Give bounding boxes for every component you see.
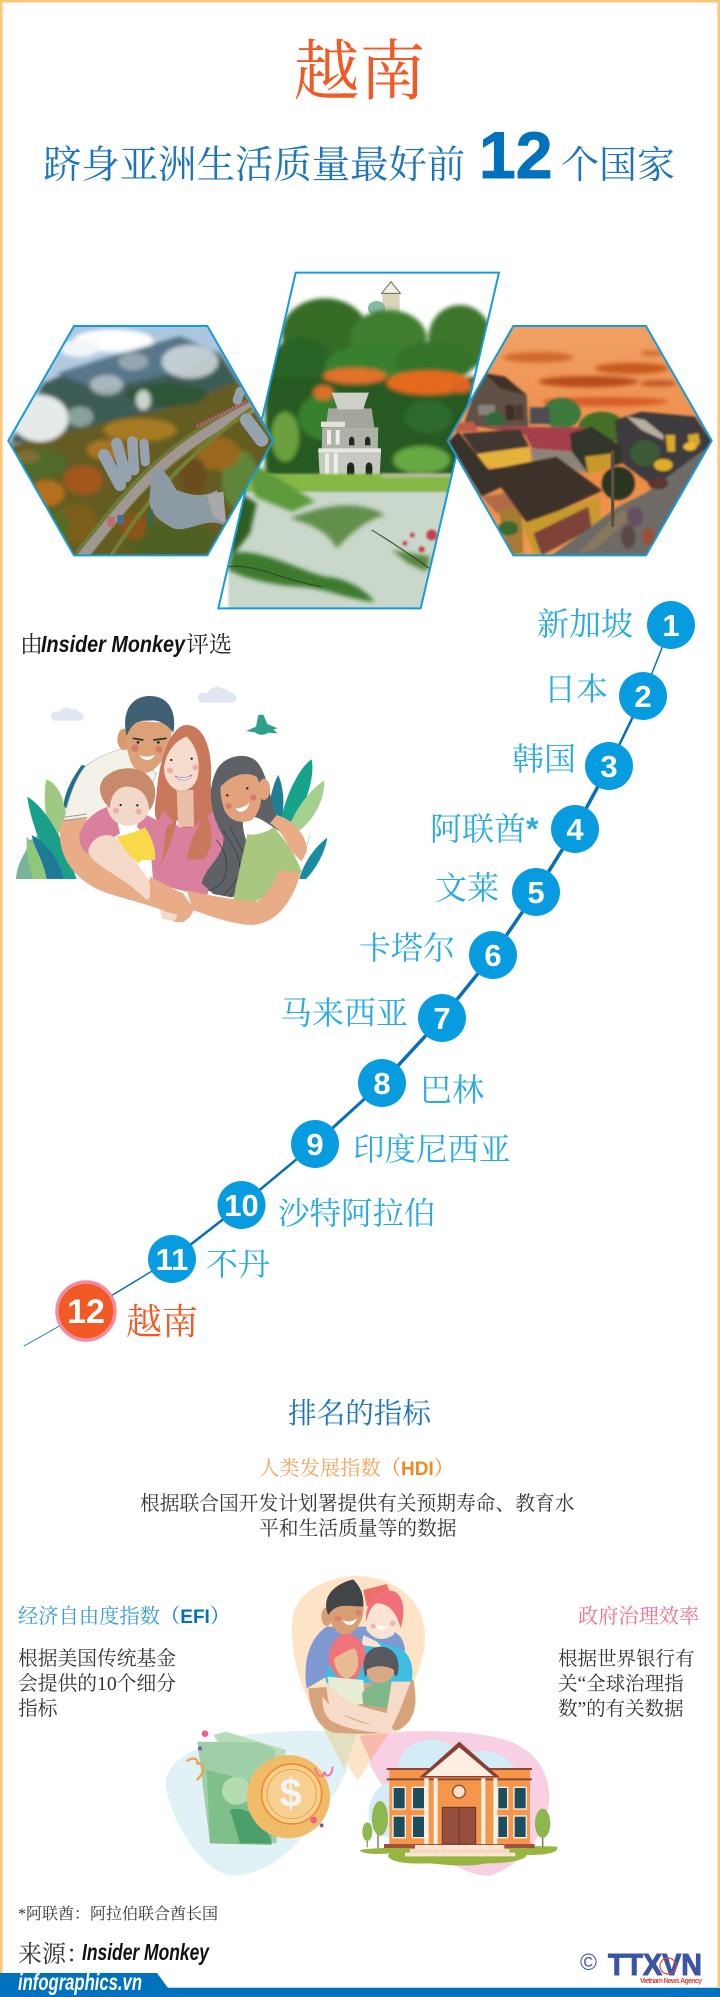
block: EFI: 经济自由度指数（EFI） [18, 1605, 230, 1628]
plants behind family [16, 759, 327, 879]
block: EFI: 指标 [18, 1698, 59, 1720]
rank 4 UAE: 阿联酋* [430, 811, 539, 847]
rank 5 Brunei: 5 [527, 875, 545, 910]
heading: ranking indicators: 排名的指标 [288, 1398, 432, 1430]
icon: clouds [51, 687, 237, 721]
rank 7 Malaysia [280, 994, 466, 1042]
subtitle: 跻身亚洲生活质量最好前 [43, 144, 465, 187]
block: HDI: 平和生活质量等的数据 [259, 1518, 457, 1540]
block: EFI: 根据美国传统基金 [18, 1648, 176, 1670]
caption: selected by Insider Monkey: 评选 [186, 632, 232, 657]
rank 10 Saudi Arabia [218, 1181, 436, 1231]
block: government effectiveness: 关“全球治理指 [558, 1673, 684, 1695]
caption: selected by Insider Monkey: 由 [20, 632, 43, 657]
rank 10 Saudi Arabia: 沙特阿拉伯 [278, 1196, 436, 1231]
rank 11 Bhutan [148, 1235, 270, 1283]
man [60, 696, 194, 923]
rank 3 South Korea [512, 741, 633, 790]
logo: TTXVN: Vietnam News Agency [640, 1978, 702, 1985]
block: HDI: 人类发展指数（HDI） [259, 1457, 454, 1480]
rank 9 Indonesia: 9 [306, 1127, 324, 1162]
rank 8 Bahrain: 巴林 [420, 1072, 484, 1108]
rank 5 Brunei: 文莱 [435, 870, 499, 906]
rank 2 Japan: 日本 [544, 671, 608, 707]
title: 越南 [294, 36, 426, 109]
block: HDI: 根据联合国开发计划署提供有关预期寿命、教育水 [140, 1493, 575, 1515]
rank 6 Qatar [359, 930, 517, 979]
family in pin [306, 1579, 415, 1734]
icon: bird [246, 715, 278, 735]
source: Insider Monkey [82, 1939, 210, 1965]
rank 11 Bhutan: 11 [156, 1242, 188, 1277]
rank 10 Saudi Arabia: 10 [224, 1188, 259, 1223]
photo: Hoi An old town at sunset [445, 320, 720, 560]
rank 1 Singapore: 新加坡 [537, 606, 633, 642]
logo: TTXVN: TTXVN [608, 1947, 702, 1982]
rank 12 Vietnam [57, 1282, 198, 1342]
block: EFI: 会提供的10个细分 [18, 1673, 176, 1695]
footer bar: infographics.vn [18, 1969, 142, 1995]
photo: Golden Bridge hands [0, 320, 280, 560]
subtitle: 个国家 [561, 145, 675, 187]
block: government effectiveness: 根据世界银行有 [558, 1648, 695, 1670]
rank 1 Singapore [537, 601, 695, 649]
woman [150, 725, 230, 897]
girl [187, 756, 307, 925]
rank 7 Malaysia: 7 [433, 1001, 451, 1036]
rank 8 Bahrain: 8 [373, 1066, 391, 1101]
block: EFI [18, 1605, 230, 1720]
footer bar [0, 1969, 720, 1997]
rank 9 Indonesia: 印度尼西亚 [353, 1132, 511, 1167]
block: HDI [140, 1457, 575, 1540]
subtitle [43, 118, 675, 192]
rank 6 Qatar: 卡塔尔 [359, 930, 455, 966]
footnote: *阿联酋：阿拉伯联合酋长国 [18, 1905, 218, 1923]
caption: selected by Insider Monkey: Insider Monkey [41, 631, 186, 657]
rank 6 Qatar: 6 [484, 938, 502, 973]
rank 11 Bhutan: 不丹 [206, 1246, 270, 1282]
rank 3 South Korea: 3 [600, 749, 618, 784]
rank 7 Malaysia: 马来西亚 [280, 995, 408, 1031]
rank 5 Brunei [435, 868, 560, 916]
subtitle: 12 [479, 118, 552, 192]
illustration: three indicator pins [166, 1576, 557, 1876]
rank 4 UAE [430, 805, 599, 853]
rank 3 South Korea: 韩国 [512, 741, 576, 777]
rank 1 Singapore: 1 [662, 608, 680, 643]
rank 2 Japan: 2 [634, 679, 652, 714]
rank 9 Indonesia [291, 1120, 511, 1168]
block: government effectiveness [558, 1605, 699, 1720]
blob: government [359, 1731, 549, 1876]
rank 4 UAE: 4 [566, 812, 584, 847]
source [18, 1939, 210, 1968]
block: government effectiveness: 数”的有关数据 [558, 1698, 684, 1720]
icon: government building [360, 1742, 557, 1866]
illustration: happy family [16, 687, 327, 925]
icon: money and coin [188, 1730, 333, 1845]
rank 12 Vietnam: 12 [67, 1293, 105, 1331]
pin [292, 1576, 425, 1781]
rank 2 Japan [544, 671, 667, 720]
source: 来源： [18, 1941, 90, 1968]
photo: Hoan Kiem lake and Turtle Tower [215, 270, 505, 612]
blob: economy [166, 1731, 357, 1876]
icon: money and coin: $ [280, 1772, 302, 1816]
rank 8 Bahrain [358, 1059, 484, 1108]
logo: TTXVN [580, 1947, 702, 1985]
rank 12 Vietnam: 越南 [126, 1302, 198, 1342]
child [79, 768, 193, 922]
ranking line [24, 625, 671, 1346]
logo: TTXVN: © [580, 1949, 597, 1975]
block: government effectiveness: 政府治理效率 [578, 1605, 699, 1628]
